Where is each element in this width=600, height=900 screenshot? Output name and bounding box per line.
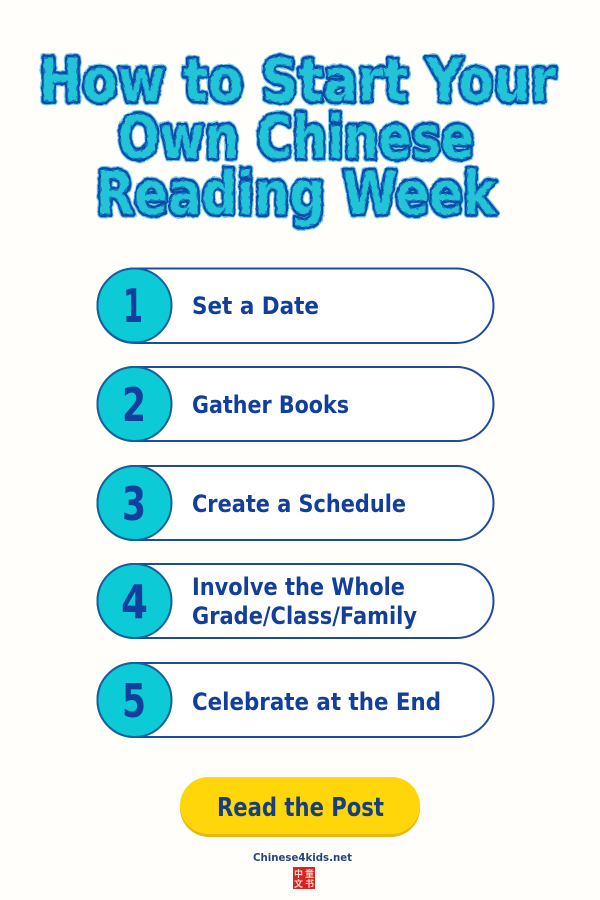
step 5: 5 xyxy=(122,674,146,728)
title: Own Chinese xyxy=(118,103,474,173)
title: Reading Week xyxy=(96,159,498,229)
logo: red seal: 书 xyxy=(305,878,314,889)
title: Own Chinese xyxy=(118,103,474,173)
step 2: 2 xyxy=(122,378,146,432)
step 2: Gather Books xyxy=(192,391,349,419)
title xyxy=(39,46,556,229)
logo: red seal: 童 xyxy=(305,868,314,879)
logo: red seal: 中 xyxy=(294,868,303,879)
step 3: Create a Schedule xyxy=(192,490,406,518)
step 5 xyxy=(98,663,494,737)
step 4: Grade/Class/Family xyxy=(192,602,417,630)
step 5: Celebrate at the End xyxy=(192,688,441,716)
button: read the post xyxy=(180,777,420,837)
step 4 xyxy=(98,564,494,638)
button: read the post: Read the Post xyxy=(217,793,384,823)
brand name: Chinese4kids.net xyxy=(253,851,352,864)
step 2 xyxy=(98,367,494,441)
step 4: 4 xyxy=(121,575,148,629)
title: Own Chinese xyxy=(118,103,474,173)
step 4: Involve the Whole xyxy=(192,573,405,601)
step 3 xyxy=(98,466,494,540)
logo: red seal: 文 xyxy=(294,878,303,889)
step 3: 3 xyxy=(122,477,146,531)
title: Reading Week xyxy=(96,159,498,229)
step 1 xyxy=(98,268,494,343)
step 1: Set a Date xyxy=(192,292,319,320)
title: Reading Week xyxy=(96,159,498,229)
step 1: 1 xyxy=(123,279,143,333)
logo: red seal xyxy=(293,867,315,889)
